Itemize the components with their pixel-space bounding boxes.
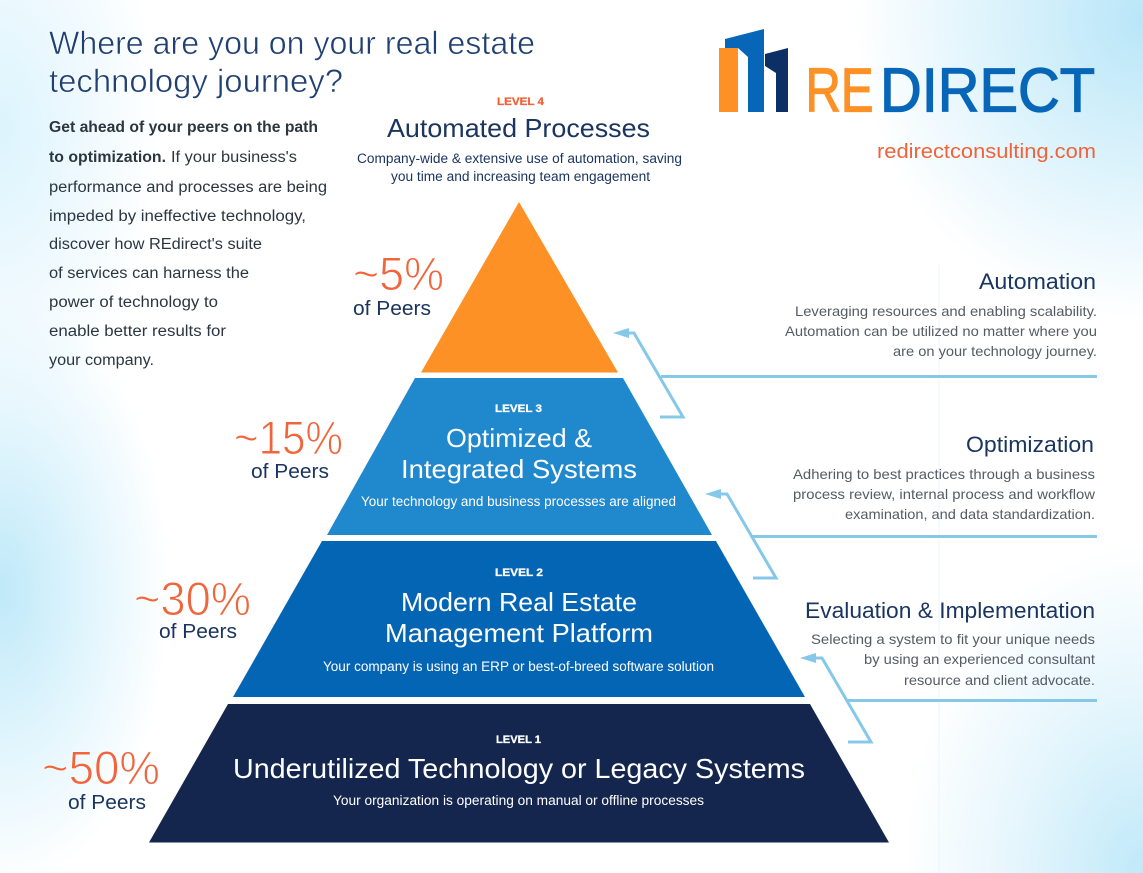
panel: optimization: process review, internal process and workflow — [793, 486, 1096, 502]
intro text block: If your business's — [171, 149, 297, 166]
level 4 heading — [357, 96, 682, 184]
panel: evaluation and implementation: Selecting a system to fit your unique needs — [811, 631, 1095, 647]
peer stat: 15%: ~15% — [234, 411, 343, 464]
panel: optimization: examination, and data standardization. — [845, 506, 1095, 522]
intro text block: Get ahead of your peers on the path — [49, 119, 318, 136]
panel: optimization: Optimization — [966, 432, 1094, 457]
intro text block: to optimization. — [49, 149, 166, 166]
panel: evaluation and implementation: resource and client advocate. — [904, 672, 1095, 688]
intro text block: performance and processes are being — [49, 179, 327, 196]
peer stat: 15%: of Peers — [251, 461, 329, 483]
pyramid tier: level 3: LEVEL 3 — [495, 403, 542, 415]
icon: building bars — [719, 29, 788, 112]
intro text block: enable better results for — [49, 323, 226, 340]
pyramid tier: level 3 — [327, 378, 712, 535]
pyramid tier: level 2: Your company is using an ERP or best-of-breed software solution — [323, 659, 714, 674]
pyramid tier: level 1: LEVEL 1 — [496, 734, 541, 746]
title: technology journey? — [49, 63, 343, 99]
intro text block: of services can harness the — [49, 265, 249, 282]
peer stat: 15% — [234, 411, 343, 483]
panel: evaluation and implementation: by using an experienced consultant — [864, 651, 1095, 667]
pyramid tier: level 4 — [421, 202, 618, 372]
panel: optimization: Adhering to best practices through a business — [793, 466, 1095, 482]
pyramid tier: level 3: Your technology and business processes are aligned — [361, 494, 676, 509]
peer stat: 5%: of Peers — [353, 298, 431, 320]
level 4 heading: LEVEL 4 — [497, 96, 545, 108]
pyramid tier: level 1: Your organization is operating on manual or offline processes — [333, 793, 704, 808]
panel: automation: are on your technology journey. — [893, 343, 1097, 359]
level 4 heading: Company-wide & extensive use of automation, saving — [357, 151, 682, 166]
panel: automation: Leveraging resources and enabling scalability. — [795, 303, 1097, 319]
peer stat: 50%: ~50% — [42, 741, 160, 794]
arrow: level 2 to level 3 — [705, 489, 776, 578]
arrow: level 1 to level 2 — [800, 653, 871, 742]
level 4 heading: you time and increasing team engagement — [391, 169, 650, 184]
logo: REdirect — [719, 29, 1095, 126]
intro text block: your company. — [49, 352, 154, 369]
intro text block: power of technology to — [49, 294, 218, 311]
panel: optimization — [752, 432, 1097, 538]
peer stat: 30%: of Peers — [159, 621, 237, 643]
website url: redirectconsulting.com — [877, 141, 1096, 163]
level 4 heading: Automated Processes — [387, 113, 650, 143]
pyramid tier: level 2: LEVEL 2 — [495, 567, 543, 579]
logo wordmark: RE — [806, 56, 874, 126]
peer stat: 50%: of Peers — [68, 792, 146, 814]
logo wordmark: DIRECT — [880, 56, 1095, 126]
peer stat: 5%: ~5% — [353, 247, 444, 300]
intro text block: impeded by ineffective technology, — [49, 208, 306, 225]
arrow: level 3 to level 4 — [613, 328, 683, 417]
intro text block — [49, 119, 327, 369]
panel: automation: Automation can be utilized no matter where you — [785, 323, 1097, 339]
intro text block: discover how REdirect's suite — [49, 236, 262, 253]
pyramid tier: level 3: Integrated Systems — [401, 454, 637, 484]
panel: automation: Automation — [979, 269, 1096, 294]
panel: automation — [661, 269, 1097, 378]
pyramid tier: level 1: Underutilized Technology or Legacy Systems — [233, 753, 805, 784]
pyramid tier: level 3: Optimized & — [446, 423, 592, 453]
pyramid tier: level 1 — [149, 704, 889, 842]
panel: evaluation and implementation — [805, 598, 1097, 702]
peer stat: 30%: ~30% — [134, 572, 251, 625]
panel: evaluation and implementation: Evaluation & Implementation — [805, 598, 1095, 623]
pyramid tier: level 2: Management Platform — [385, 618, 653, 648]
pyramid tier: level 2: Modern Real Estate — [401, 587, 637, 617]
title — [49, 25, 535, 99]
pyramid tier: level 2 — [233, 541, 805, 697]
title: Where are you on your real estate — [49, 25, 535, 61]
pyramid — [149, 202, 889, 842]
